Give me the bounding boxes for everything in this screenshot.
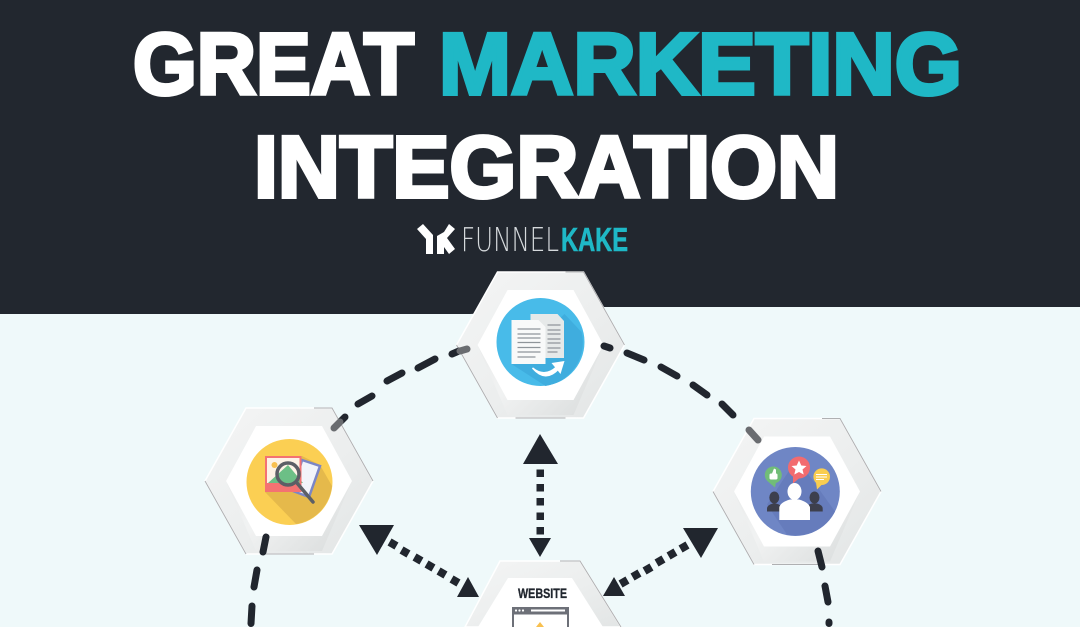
logo wordmark: funnel: FUNNEL (461, 220, 559, 259)
background: pale lower panel (0, 300, 1080, 627)
hexagon: image search (205, 408, 373, 554)
arrow: left double-headed (359, 525, 479, 597)
title (133, 16, 962, 216)
logo mark (417, 224, 455, 254)
icon: documents circle (496, 298, 584, 386)
icon: social circle (751, 447, 840, 536)
logo: FunnelKake (417, 220, 628, 259)
hexagon: content documents (456, 272, 624, 418)
dashed connector: outer ring (251, 346, 829, 624)
hexagon: social media (713, 418, 881, 564)
title: GREAT (133, 16, 414, 113)
icon: browser window (512, 607, 569, 627)
icon: image magnifier circle (246, 439, 332, 525)
arrow: right double-headed (603, 528, 718, 596)
label: website: WEBSITE (518, 585, 567, 601)
background: dark header band (0, 0, 1080, 314)
title: INTEGRATION (254, 119, 839, 216)
title: MARKETING (439, 16, 962, 113)
logo wordmark: kake: KAKE (561, 221, 628, 258)
arrow: vertical double-headed (523, 434, 558, 557)
hexagon: website (465, 561, 621, 627)
